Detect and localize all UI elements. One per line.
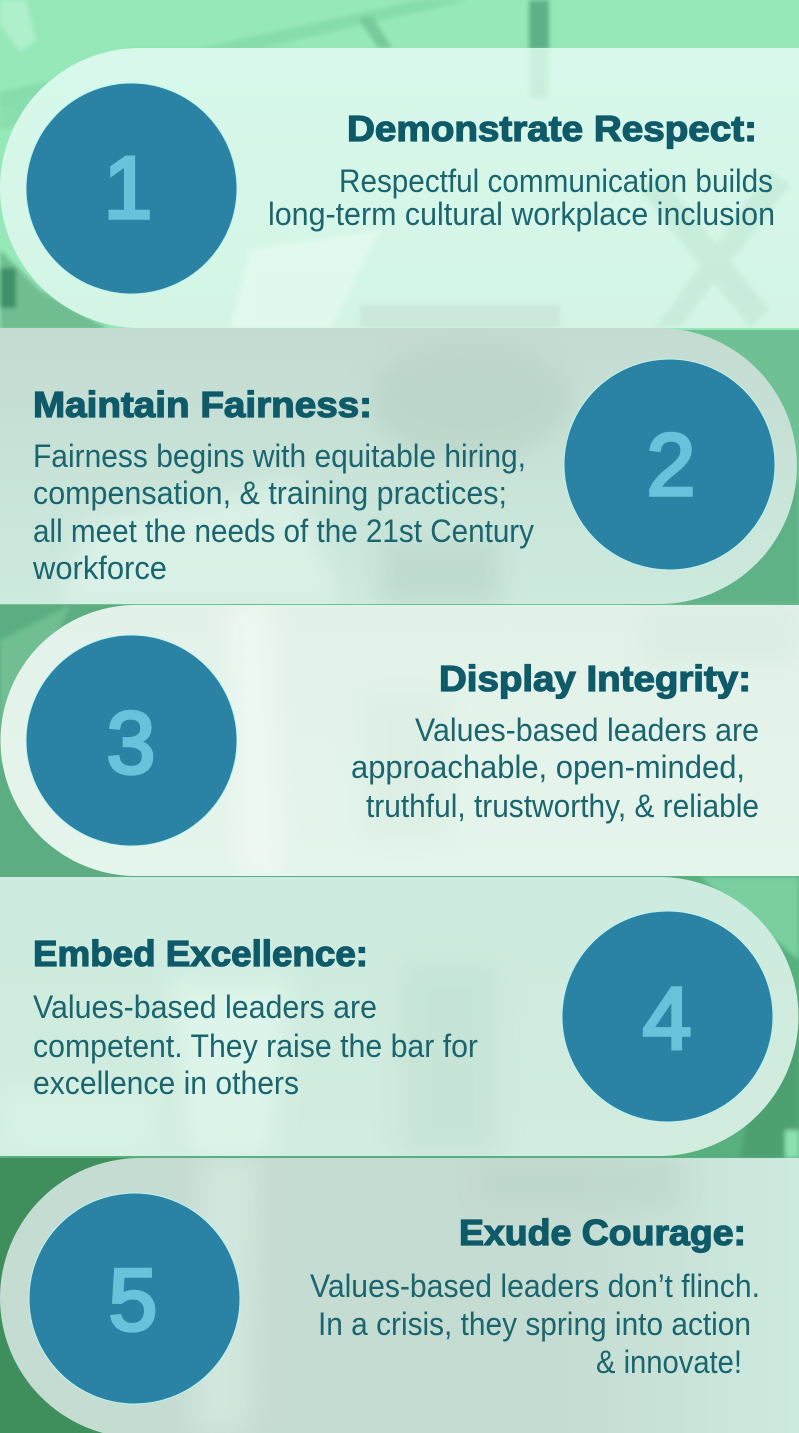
- body text 1: Respectful communication builds: [339, 163, 773, 199]
- body text 2: workforce: [32, 550, 167, 586]
- body text 3: [351, 712, 759, 824]
- heading 3: Display Integrity:: [439, 658, 751, 699]
- body text 5: & innovate!: [596, 1344, 742, 1380]
- panel 2 background: [0, 328, 797, 604]
- body text 4: competent. They raise the bar for: [33, 1028, 478, 1064]
- number 2: 2: [647, 415, 695, 514]
- circle 5: [29, 1193, 240, 1404]
- panel 5 background: [0, 1158, 799, 1433]
- panel 3: display integrity: [0, 605, 799, 876]
- number 4: 4: [643, 969, 691, 1068]
- heading 1: Demonstrate Respect:: [347, 108, 757, 149]
- body text 3: approachable, open-minded,: [351, 749, 745, 785]
- circle 3: [26, 635, 237, 846]
- panel 5 faint photo: [190, 1158, 680, 1433]
- body text 1: [268, 163, 775, 232]
- panel 3 background: [0, 605, 799, 876]
- body text 2: [32, 438, 534, 586]
- heading 4: Embed Excellence:: [33, 933, 368, 974]
- panel 4: embed excellence: [0, 877, 798, 1156]
- panel 5: exude courage: [0, 1158, 799, 1433]
- body text 1: long-term cultural workplace inclusion: [268, 196, 775, 232]
- panel 3 faint photo: [240, 617, 270, 862]
- body text 3: Values-based leaders are: [415, 712, 759, 748]
- circle 2: [564, 359, 775, 570]
- body text 5: In a crisis, they spring into action: [318, 1306, 751, 1342]
- panel 1 background: [0, 48, 799, 328]
- heading 2: Maintain Fairness:: [33, 384, 372, 425]
- heading 5: Exude Courage:: [459, 1212, 746, 1253]
- body text 5: [310, 1268, 760, 1380]
- number 5: 5: [109, 1250, 157, 1349]
- circle 1: [26, 83, 237, 294]
- panel 2 faint photo: [72, 358, 558, 602]
- panel 4 background: [0, 877, 798, 1156]
- number 3: 3: [107, 693, 155, 792]
- number 1: 1: [104, 138, 152, 237]
- body text 4: Values-based leaders are: [33, 989, 377, 1025]
- panel 1: demonstrate respect: [0, 48, 799, 328]
- panel 1 faint photo: [230, 48, 790, 328]
- body text 3: truthful, trustworthy, & reliable: [366, 788, 759, 824]
- body text 2: Fairness begins with equitable hiring,: [33, 438, 526, 474]
- body text 2: all meet the needs of the 21st Century: [33, 513, 534, 549]
- body text 2: compensation, & training practices;: [33, 475, 507, 511]
- body text 5: Values-based leaders don’t flinch.: [310, 1268, 760, 1304]
- body text 4: excellence in others: [33, 1065, 299, 1101]
- panel 4 faint photo: [177, 976, 492, 1150]
- panel 2: maintain fairness: [0, 328, 797, 604]
- body text 4: [33, 989, 478, 1101]
- circle 4: [562, 911, 773, 1122]
